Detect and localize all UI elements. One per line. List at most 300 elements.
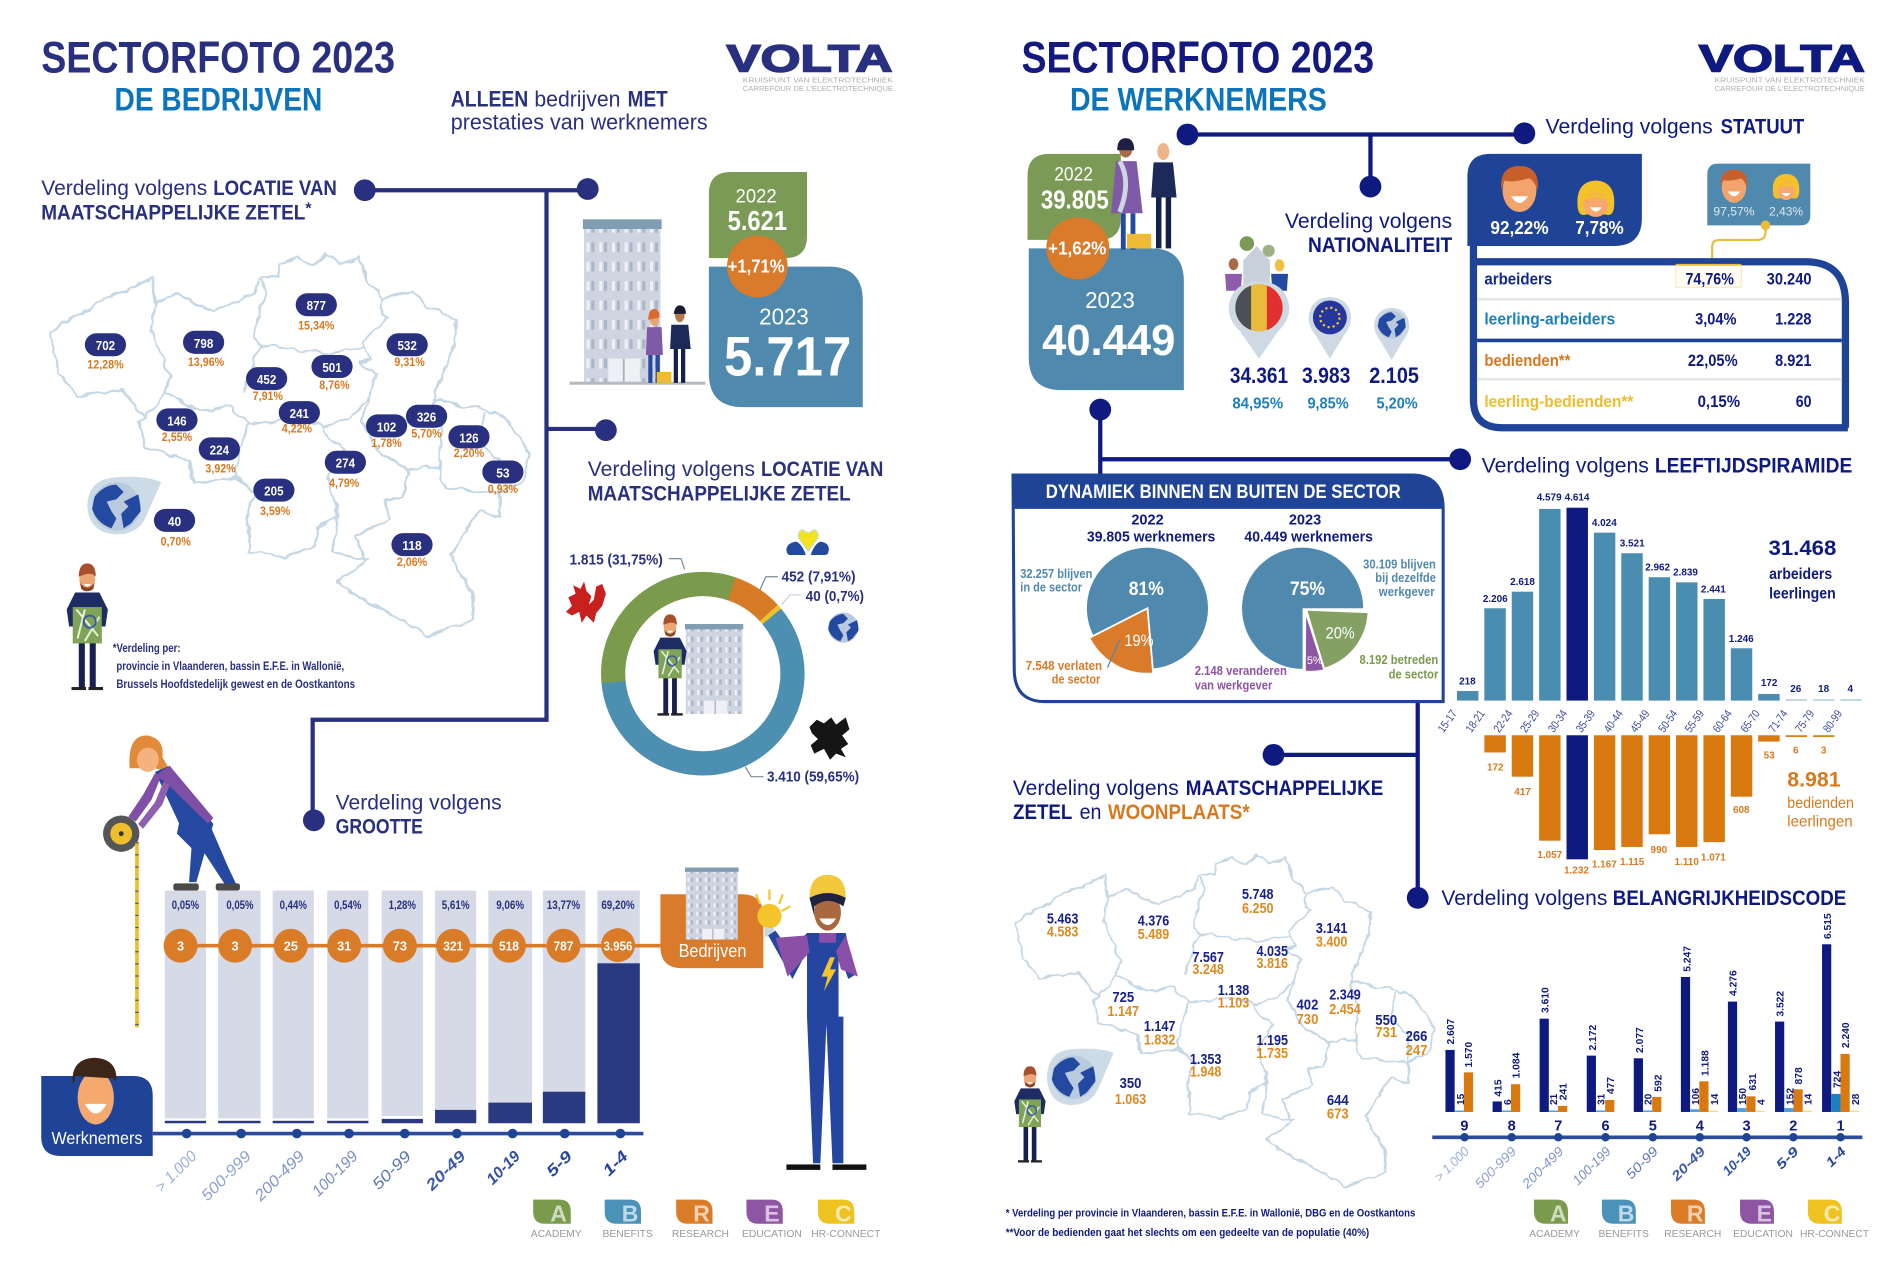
panel: gender split arbeiders: 2,43% xyxy=(1769,205,1803,219)
axis: size classes left: 50-99 xyxy=(369,1148,415,1193)
chart: age labels: 15-17 xyxy=(1436,708,1460,735)
panel subtitles: 2023 xyxy=(1289,513,1321,529)
chart: age labels: 50-54 xyxy=(1657,708,1681,735)
chart: belangrijkheidscode bars: 20 xyxy=(1644,1093,1655,1105)
axis: codes and size classes right: 1-4 xyxy=(1823,1143,1849,1170)
chart: belangrijkheidscode bars: 4 xyxy=(1756,1099,1767,1105)
stat: 2023 companies: 5.717 xyxy=(724,326,851,388)
logo: Volta left: KRUISPUNT VAN ELEKTROTECHNIEK xyxy=(743,75,893,84)
heading: locatie map: LOCATIE VAN xyxy=(213,177,337,200)
map value: Waals-Brabant: 241 xyxy=(290,406,309,421)
map: Belgium employees: 266 xyxy=(1406,1029,1427,1045)
panel subtitles: 2022 xyxy=(1131,513,1164,529)
map value: Huy-Waremme xyxy=(366,414,407,450)
map: Belgium employees: 1.138 xyxy=(1218,983,1249,999)
illustration: house and neighbours xyxy=(1225,236,1288,291)
illustration: man with map right xyxy=(1014,1066,1046,1163)
chart: age pyramid bedienden: 53 xyxy=(1764,751,1775,762)
map: Belgium employees: 725 xyxy=(1112,990,1134,1006)
chart: companies per size line: 3 xyxy=(232,939,239,954)
chart: age pyramid bedienden: 1.057 xyxy=(1537,850,1563,861)
title: Sectorfoto werknemers: SECTORFOTO 2023 xyxy=(1021,32,1374,83)
icon: pin Europe xyxy=(1309,297,1351,359)
chart: belangrijkheidscode bars: 14 xyxy=(1710,1093,1721,1105)
map value: Liege: 326 xyxy=(417,410,436,425)
axis: size classes left xyxy=(152,1129,643,1205)
panel: gender split all: 92,22% xyxy=(1490,218,1549,238)
heading: leeftijdspiramide: LEEFTIJDSPIRAMIDE xyxy=(1655,455,1852,478)
chart: age pyramid arbeiders: 4.579 xyxy=(1537,492,1562,503)
map value: abroad with globe: 40 xyxy=(168,514,181,529)
chart: company size columns: 9,06% xyxy=(496,898,524,912)
table: statuut xyxy=(1473,246,1848,428)
legend: brands left: ACADEMY xyxy=(531,1229,582,1240)
panel subtitles: 40.449 werknemers xyxy=(1244,530,1373,546)
chart: company size columns: 13,77% xyxy=(547,898,580,912)
axis: size classes left: > 1.000 xyxy=(152,1148,201,1196)
map: Belgium employees: 1.735 xyxy=(1257,1046,1288,1062)
axis: codes and size classes right: 9 xyxy=(1460,1119,1469,1135)
chart: age labels: 65-70 xyxy=(1739,708,1763,735)
map value: Oost-Vlaanderen xyxy=(183,331,224,369)
chart: belangrijkheidscode bars: 241 xyxy=(1559,1083,1570,1100)
chart: age pyramid arbeiders: 218 xyxy=(1459,677,1476,688)
map: Belgium employees: 3.816 xyxy=(1257,956,1288,972)
table: statuut: leerling-arbeiders xyxy=(1484,310,1615,329)
chart: belangrijkheidscode bars xyxy=(1445,913,1862,1112)
axis: codes and size classes right: 20-49 xyxy=(1668,1143,1709,1184)
map: Belgium employees: 1.103 xyxy=(1218,996,1249,1012)
map value: Limburg: 532 xyxy=(397,338,417,353)
map value: Leuven xyxy=(311,355,353,392)
chart: company size columns xyxy=(165,891,640,1123)
map: Belgium employees: 2.454 xyxy=(1329,1002,1361,1018)
chart: age labels: 40-44 xyxy=(1602,708,1626,735)
map value: West-Vlaanderen: 702 xyxy=(96,338,115,353)
legend: brands left: B xyxy=(622,1200,638,1226)
chart: belangrijkheidscode bars: 4.276 xyxy=(1728,970,1739,996)
chart: age labels: 71-74 xyxy=(1767,708,1791,735)
map: Belgium employees xyxy=(1014,854,1435,1187)
legend: brands right: EDUCATION xyxy=(1733,1229,1793,1240)
chart: companies per size line: 73 xyxy=(393,939,407,954)
chart: age pyramid bedienden: 6 xyxy=(1793,746,1799,757)
pie labels: van werkgever xyxy=(1195,677,1272,692)
map value: abroad with globe: 0,70% xyxy=(161,534,191,548)
heading: nationaliteit: NATIONALITEIT xyxy=(1308,234,1452,257)
chart: age pyramid arbeiders: 172 xyxy=(1761,678,1778,689)
pie 2022: 19% xyxy=(1124,632,1154,650)
chart: age pyramid arbeiders: 1.246 xyxy=(1729,634,1754,645)
illustration: woman with measuring tape xyxy=(103,735,240,1028)
stat: bedienden total: bedienden xyxy=(1787,795,1854,812)
legend: brands right: B xyxy=(1618,1200,1634,1226)
badge: growth 1,71% xyxy=(727,236,788,297)
map: Belgium employees: 731 xyxy=(1375,1025,1397,1041)
title: Sectorfoto bedrijven: DE BEDRIJVEN xyxy=(115,80,322,117)
legend: brands left: A xyxy=(550,1200,567,1226)
heading: zetel en woonplaats: MAATSCHAPPELIJKE xyxy=(1186,777,1383,800)
connector lines right xyxy=(1089,122,1535,909)
chart: age labels: 45-49 xyxy=(1629,708,1652,735)
heading: nationaliteit: Verdeling volgens xyxy=(1285,210,1452,233)
map value: Oost-Vlaanderen: 13,96% xyxy=(188,355,224,369)
axis: size classes left: 20-49 xyxy=(422,1148,470,1195)
map: Belgium employees: 1.147 xyxy=(1144,1019,1175,1035)
map value: Oostkantons: 0,93% xyxy=(488,482,518,496)
map value: Antwerpen: 15,34% xyxy=(298,319,335,333)
map: Belgium employees: 3.248 xyxy=(1192,962,1224,978)
chart: age pyramid arbeiders: 2.618 xyxy=(1510,577,1535,588)
map value: Namur xyxy=(325,451,366,490)
legend: brands left: EDUCATION xyxy=(742,1229,802,1240)
stats: nationality values: 3.983 xyxy=(1302,363,1350,388)
illustration: two colleagues xyxy=(1111,138,1177,250)
legend: brands right: R xyxy=(1687,1200,1704,1226)
axis: size classes left: 1-4 xyxy=(600,1148,632,1180)
axis: codes and size classes right: 6 xyxy=(1601,1119,1610,1135)
pie 2022 xyxy=(1087,548,1208,674)
stat: arbeiders total: leerlingen xyxy=(1769,586,1836,603)
chart: company size columns: 69,20% xyxy=(601,898,635,912)
axis: size classes left: 500-999 xyxy=(198,1148,255,1205)
table: statuut: 60 xyxy=(1796,393,1812,411)
map value: Limburg xyxy=(387,333,428,369)
map: Belgium employees: 673 xyxy=(1327,1106,1349,1122)
stat: 2022 employees: 2022 xyxy=(1054,164,1093,186)
logo: Volta right xyxy=(1699,37,1865,93)
stats: nationality values: 9,85% xyxy=(1307,395,1349,412)
map value: Namur: 274 xyxy=(336,456,355,471)
title: Sectorfoto bedrijven: SECTORFOTO 2023 xyxy=(41,32,395,83)
stat: bedienden total: leerlingen xyxy=(1787,813,1853,830)
axis: codes and size classes right: 8 xyxy=(1508,1119,1516,1135)
map: Belgium employees: 4.583 xyxy=(1047,925,1078,941)
chart: belangrijkheidscode bars: 14 xyxy=(1804,1093,1815,1105)
chart: age pyramid arbeiders: 26 xyxy=(1790,684,1802,695)
text block: alleen bedrijven met prestaties: MET xyxy=(628,87,668,112)
map value: Brussel xyxy=(246,367,287,403)
panel subtitles: 39.805 werknemers xyxy=(1087,530,1215,546)
axis: codes and size classes right: > 1.000 xyxy=(1431,1143,1472,1184)
map value: Antwerpen: 877 xyxy=(307,298,326,313)
chart: companies per size line: 321 xyxy=(443,939,463,954)
chart: belangrijkheidscode bars: 28 xyxy=(1851,1093,1862,1105)
icon: Flemish lion xyxy=(809,717,849,760)
chart: companies per size line: 31 xyxy=(337,939,351,954)
legend: brands right: BENEFITS xyxy=(1599,1229,1649,1240)
axis: size classes left: 10-19 xyxy=(484,1148,524,1188)
heading: locatie donut: LOCATIE VAN xyxy=(761,458,883,481)
label box: Werknemers: Werknemers xyxy=(52,1128,143,1148)
table: statuut: 74,76% xyxy=(1685,271,1734,289)
chart: age pyramid arbeiders: 2.206 xyxy=(1483,594,1508,605)
map value: Wallonie Picarde: 2,55% xyxy=(162,430,192,444)
chart: age pyramid bedienden: 1.167 xyxy=(1592,860,1617,871)
chart: age pyramid arbeiders: 2.839 xyxy=(1673,568,1698,579)
connector lines left xyxy=(303,178,617,831)
map value: Leuven: 8,76% xyxy=(319,378,350,392)
pie labels: 2.148 veranderen xyxy=(1195,663,1287,678)
chart: age pyramid bedienden: 1.110 xyxy=(1675,857,1699,868)
chart: company size columns: 0,44% xyxy=(280,898,307,912)
table: statuut: 1.228 xyxy=(1775,311,1812,329)
pie labels: de sector xyxy=(1389,667,1438,682)
pie labels: bij dezelfde xyxy=(1375,570,1436,585)
stats: nationality values: 84,95% xyxy=(1232,395,1283,412)
map: Belgium employees: 5.489 xyxy=(1138,927,1169,943)
chart: age pyramid bedienden: 172 xyxy=(1487,763,1504,774)
chart: age labels: 22-24 xyxy=(1492,708,1516,735)
map: Belgium employees: 6.250 xyxy=(1242,901,1274,917)
chart: company size columns: 1,28% xyxy=(389,898,416,912)
map: Belgium employees: 5.463 xyxy=(1047,911,1078,927)
chart: age labels: 55-59 xyxy=(1683,708,1707,735)
chart: age pyramid arbeiders: 2.441 xyxy=(1701,585,1726,596)
chart: companies per size line: 25 xyxy=(284,939,298,954)
map value: Luxembourg xyxy=(391,533,433,569)
chart: age pyramid bedienden: 1.071 xyxy=(1701,852,1726,863)
map: Belgium employees: 1.147 xyxy=(1108,1004,1139,1020)
stat: 2022 employees xyxy=(1028,154,1121,240)
map value: Verviers xyxy=(448,425,490,460)
label box: Werknemers xyxy=(41,1058,153,1156)
map: Belgium employees: 5.748 xyxy=(1242,887,1274,903)
map: Belgium companies xyxy=(49,253,530,636)
chart: companies per size line: 787 xyxy=(553,939,573,954)
stat: arbeiders total: 31.468 xyxy=(1768,537,1837,560)
map value: Oost-Vlaanderen: 798 xyxy=(194,336,213,351)
chart: belangrijkheidscode bars: 2.240 xyxy=(1841,1022,1852,1048)
pie labels xyxy=(1020,556,1438,692)
map: Belgium employees: 1.832 xyxy=(1144,1032,1175,1048)
map value: Oostkantons: 53 xyxy=(496,465,510,480)
donut label: Brussel xyxy=(760,569,855,590)
chart: age pyramid bedienden: 3 xyxy=(1821,746,1827,757)
map: Belgium employees: 1.353 xyxy=(1190,1052,1221,1068)
chart: belangrijkheidscode bars: 2.077 xyxy=(1635,1027,1646,1053)
chart: belangrijkheidscode bars: 878 xyxy=(1794,1067,1805,1084)
chart: belangrijkheidscode bars: 5.247 xyxy=(1682,946,1693,972)
map value: abroad employees with globe: 1.063 xyxy=(1115,1092,1146,1108)
table: statuut: 22,05% xyxy=(1688,352,1738,370)
stat: 2022 companies: 2022 xyxy=(736,185,777,207)
logo: Volta right: VOLTA xyxy=(1699,37,1865,79)
heading: statuut: Verdeling volgens xyxy=(1546,115,1713,138)
chart: company size columns: 0,05% xyxy=(226,898,254,912)
map value: Luxembourg: 2,06% xyxy=(397,555,427,569)
panel: gender split arbeiders: 97,57% xyxy=(1713,205,1755,219)
map value: Limburg: 9,31% xyxy=(394,355,425,369)
panel: gender split arbeiders xyxy=(1707,164,1810,225)
panel: gender split all xyxy=(1467,154,1642,246)
stats: nationality values: 2.105 xyxy=(1369,363,1419,388)
chart: age pyramid arbeiders xyxy=(1457,492,1862,701)
heading: zetel en woonplaats: Verdeling volgens xyxy=(1013,777,1179,800)
label box: Bedrijven: Bedrijven xyxy=(679,941,746,961)
map value: abroad employees with globe: 350 xyxy=(1120,1076,1141,1092)
logo: Volta right: KRUISPUNT VAN ELEKTROTECHNIEK xyxy=(1715,75,1865,84)
title: Sectorfoto werknemers xyxy=(1021,32,1374,117)
chart: companies per size line: 518 xyxy=(499,939,519,954)
illustration: worker with lightbulb xyxy=(756,875,866,1170)
chart: age pyramid arbeiders: 18 xyxy=(1818,684,1830,695)
map: Belgium employees: 247 xyxy=(1406,1043,1427,1059)
footnote: distribution: Brussels Hoofdstedelijk gewest en de Oostkantons xyxy=(116,679,355,691)
stat: 2023 employees xyxy=(1029,248,1184,390)
icon: pin world xyxy=(1374,308,1409,360)
axis: codes and size classes right: 500-999 xyxy=(1472,1143,1520,1191)
map value: Wallonie Picarde xyxy=(156,408,198,444)
chart: age labels: 75-79 xyxy=(1794,708,1817,735)
chart: belangrijkheidscode bars: 150 xyxy=(1738,1088,1749,1105)
axis: codes and size classes right: 200-499 xyxy=(1518,1143,1567,1192)
pie labels: in de sector xyxy=(1020,579,1082,594)
chart: age pyramid bedienden: 1.232 xyxy=(1564,866,1589,877)
chart: belangrijkheidscode bars: 724 xyxy=(1833,1071,1844,1088)
stat: bedienden total: 8.981 xyxy=(1787,768,1841,791)
map: Belgium employees: 7.567 xyxy=(1192,950,1224,966)
stat: 2023 employees: 40.449 xyxy=(1042,317,1175,365)
map value: Luxembourg: 118 xyxy=(402,538,422,553)
donut label: buitenland: 40 (0,7%) xyxy=(806,588,864,605)
chart: belangrijkheidscode bars: 631 xyxy=(1748,1073,1759,1091)
panel subtitles xyxy=(1087,513,1373,546)
illustration: donut centre man and building xyxy=(654,614,743,716)
chart: age labels: 80-99 xyxy=(1821,708,1845,735)
logo: Volta left: VOLTA xyxy=(726,37,892,79)
chart: age pyramid arbeiders: 3.521 xyxy=(1620,538,1645,549)
chart: age pyramid bedienden: 608 xyxy=(1733,805,1750,816)
stat: 2023 companies: 2023 xyxy=(759,304,809,330)
table: statuut: 0,15% xyxy=(1698,393,1740,411)
icon: pin Belgium xyxy=(1229,281,1289,359)
axis: size classes left: 100-199 xyxy=(309,1148,362,1200)
text block: alleen bedrijven met prestaties: prestaties van werknemers xyxy=(451,110,708,135)
chart: company size columns: 0,54% xyxy=(334,898,362,912)
chart: age labels: 35-39 xyxy=(1574,708,1598,735)
donut label: Vlaanderen xyxy=(745,767,859,786)
pie labels: de sector xyxy=(1052,671,1100,686)
map value: Oostkantons xyxy=(482,460,523,496)
chart: belangrijkheidscode bars: 6 xyxy=(1503,1099,1514,1105)
axis: codes and size classes right: 3 xyxy=(1743,1119,1751,1135)
map value: Huy-Waremme: 1,78% xyxy=(371,436,402,450)
pie 2023: 5% xyxy=(1307,655,1323,667)
heading: locatie map: * xyxy=(305,200,312,217)
map value: Brussel: 452 xyxy=(257,372,276,387)
pie 2022: 81% xyxy=(1129,578,1164,600)
logo: Volta left xyxy=(726,37,893,93)
label box: Bedrijven xyxy=(660,868,763,968)
chart: company size columns: 5,61% xyxy=(442,898,470,912)
map: Belgium employees: 730 xyxy=(1297,1012,1318,1028)
chart: belangrijkheidscode bars: 152 xyxy=(1785,1088,1796,1105)
axis: codes and size classes right xyxy=(1431,1119,1862,1192)
donut label: Brussel: 452 (7,91%) xyxy=(782,569,855,586)
heading: grootte: GROOTTE xyxy=(336,816,423,839)
chart: belangrijkheidscode bars: 592 xyxy=(1653,1074,1664,1092)
legend: brands left: RESEARCH xyxy=(672,1229,729,1240)
legend: brands left: BENEFITS xyxy=(603,1229,653,1240)
map: Belgium employees: 4.376 xyxy=(1138,914,1169,930)
chart: belangrijkheidscode bars: 1.084 xyxy=(1511,1052,1522,1078)
axis: size classes left: 200-499 xyxy=(251,1148,308,1205)
map value: Wallonie Picarde: 146 xyxy=(167,413,187,428)
chart: companies per size line: 3.956 xyxy=(603,939,633,954)
axis: codes and size classes right: 2 xyxy=(1789,1119,1797,1135)
table: statuut: 8.921 xyxy=(1775,352,1812,370)
legend: brands right: A xyxy=(1550,1200,1567,1226)
map value: abroad employees with globe xyxy=(1047,1049,1146,1108)
axis: codes and size classes right: 10-19 xyxy=(1720,1143,1755,1178)
legend: brands left: HR-CONNECT xyxy=(811,1229,881,1240)
legend: brands right: RESEARCH xyxy=(1664,1229,1721,1240)
map value: Charleroi: 3,59% xyxy=(260,504,290,518)
footnote: distribution: *Verdeling per: xyxy=(113,643,181,655)
chart: belangrijkheidscode bars: 6.515 xyxy=(1823,913,1834,939)
axis: codes and size classes right: 7 xyxy=(1554,1119,1562,1135)
chart: belangrijkheidscode bars: 2.172 xyxy=(1588,1025,1599,1051)
map: Belgium employees: 3.141 xyxy=(1316,921,1347,937)
chart: age pyramid bedienden xyxy=(1484,735,1834,877)
chart: belangrijkheidscode bars: 477 xyxy=(1606,1077,1617,1094)
map value: Mons: 3,92% xyxy=(205,462,236,476)
icon: Wallonia rooster xyxy=(566,582,606,623)
text block: alleen bedrijven met prestaties: ALLEEN xyxy=(451,87,528,112)
donut label: Vlaanderen: 3.410 (59,65%) xyxy=(767,769,859,786)
map value: Huy-Waremme: 102 xyxy=(377,419,396,434)
heading: locatie donut: Verdeling volgens xyxy=(588,458,755,481)
heading: zetel en woonplaats: WOONPLAATS* xyxy=(1108,801,1250,824)
table: statuut: 3,04% xyxy=(1695,311,1737,329)
legend: brands left: C xyxy=(835,1200,852,1226)
legend: brands right: C xyxy=(1824,1200,1840,1226)
axis: codes and size classes right: 4 xyxy=(1696,1119,1704,1135)
chart: age labels xyxy=(1436,708,1845,735)
heading: leeftijdspiramide: Verdeling volgens xyxy=(1482,455,1649,478)
map: Belgium employees: 1.195 xyxy=(1257,1033,1288,1049)
chart: age pyramid arbeiders: 4 xyxy=(1848,684,1854,695)
axis: codes and size classes right: 5 xyxy=(1649,1119,1657,1135)
map value: Verviers: 126 xyxy=(459,430,479,445)
logo: Volta right: CARREFOUR DE L'ELECTROTECHNIQUE xyxy=(1715,84,1865,93)
chart: age labels: 30-34 xyxy=(1546,708,1570,735)
footnotes right: * Verdeling per provincie in Vlaanderen, bassin E.F.E. in Wallonië, DBG en de Oostkantons xyxy=(1006,1208,1415,1220)
legend: brands left xyxy=(531,1200,881,1240)
map value: Antwerpen xyxy=(296,293,337,333)
map value: Charleroi xyxy=(253,479,294,518)
chart: belangrijkheidscode bars: 3.610 xyxy=(1541,987,1552,1013)
map: Belgium employees: 1.948 xyxy=(1190,1065,1221,1081)
map: Belgium employees: 644 xyxy=(1327,1093,1349,1109)
map: Belgium employees: 4.035 xyxy=(1257,944,1288,960)
stats: nationality values: 34.361 xyxy=(1230,363,1288,388)
map value: Liege: 5,70% xyxy=(411,426,442,440)
stats: nationality values xyxy=(1230,363,1419,412)
stat: 2023 employees: 2023 xyxy=(1085,287,1135,313)
connector: gender to arbeiders xyxy=(1712,221,1770,264)
chart: belangrijkheidscode bars: 2.607 xyxy=(1446,1018,1457,1044)
map value: Namur: 4,79% xyxy=(329,476,359,490)
table: statuut: bedienden** xyxy=(1484,351,1571,370)
chart: company size columns: 0,05% xyxy=(172,898,199,912)
stat: bedienden total xyxy=(1787,768,1854,830)
map value: Mons: 224 xyxy=(210,442,229,457)
map: Belgium employees: 3.400 xyxy=(1316,934,1347,950)
badge: growth 1,62% xyxy=(1046,217,1109,279)
axis: codes and size classes right: 50-99 xyxy=(1623,1143,1661,1182)
